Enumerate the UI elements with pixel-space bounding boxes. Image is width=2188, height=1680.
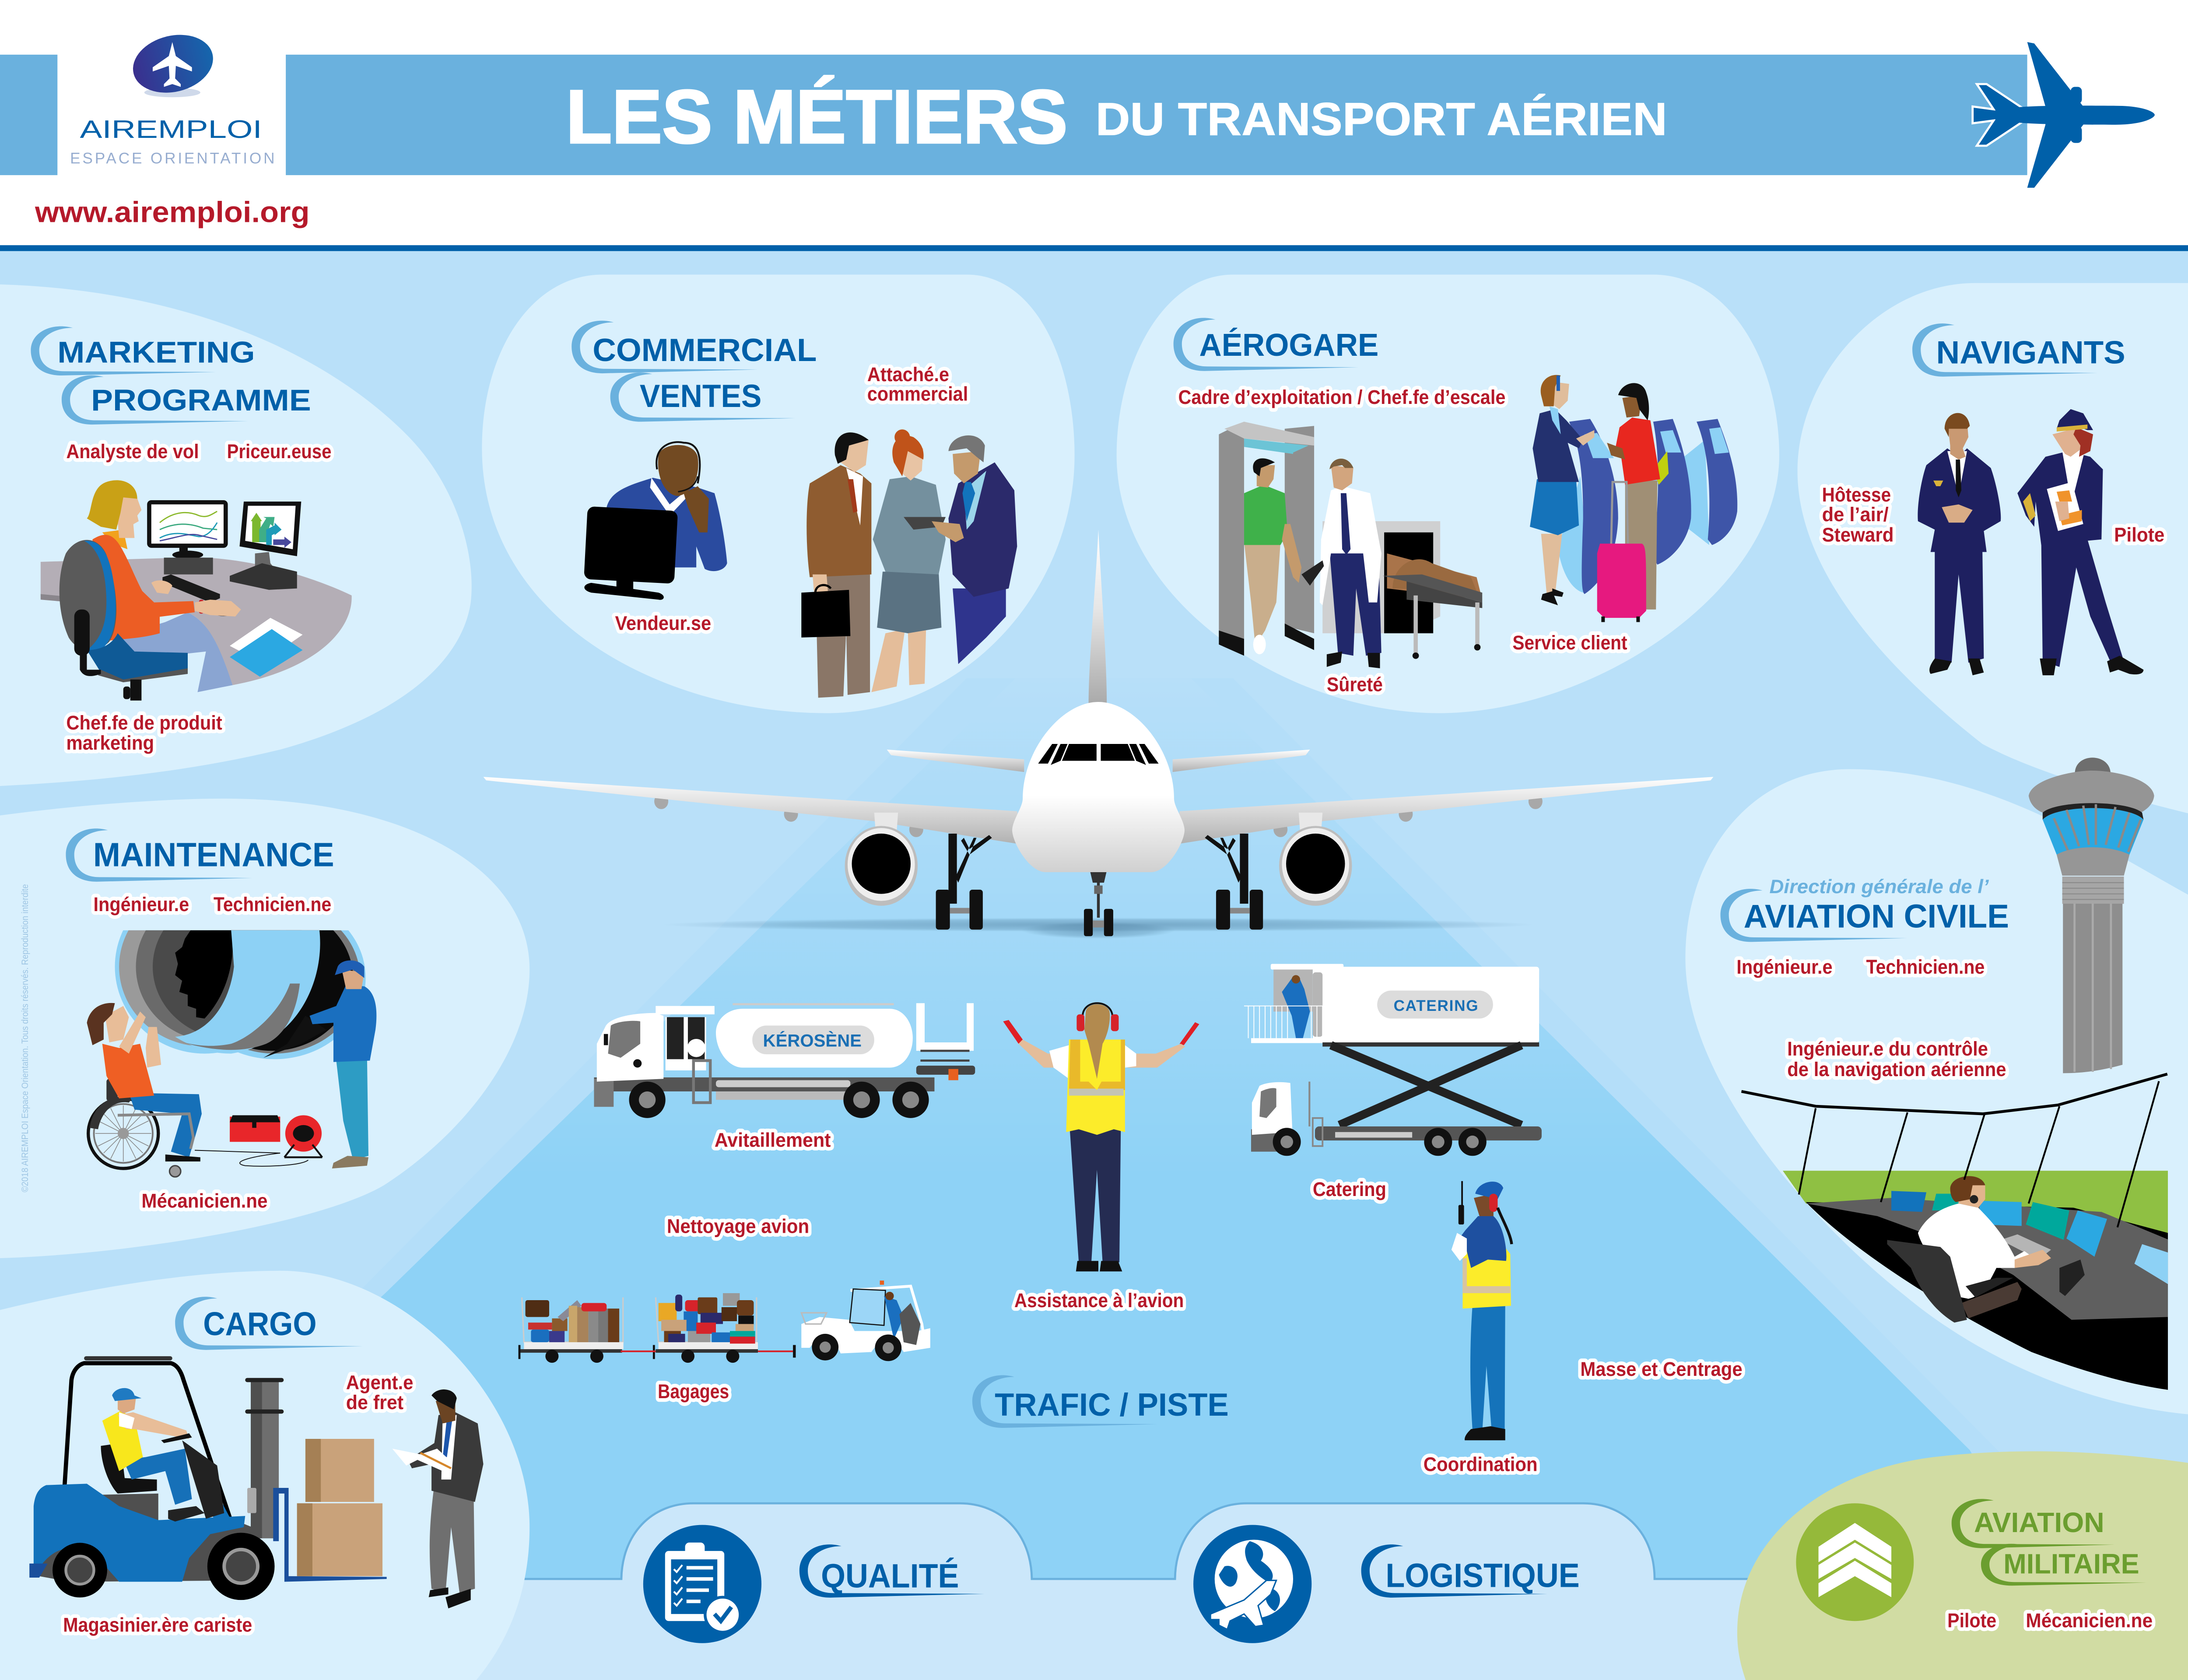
heading: qualite: QUALITÉ [821,1557,959,1595]
heading: trafic piste [972,1375,1229,1428]
job labels: Priceur.euse [227,440,331,463]
job labels [1178,386,1627,696]
illustration: toolbox and cable reel [195,1115,322,1166]
illustration: forklift [29,1356,387,1600]
job labels: Masse et Centrage [1580,1358,1743,1380]
job labels: Pilote [1947,1610,1996,1632]
job labels: Assistance à l’avion [1014,1289,1184,1312]
job labels: Ingénieur.e [1736,956,1833,978]
airplane shadow [663,918,1534,939]
heading: maintenance [66,828,334,882]
illustration: check-in kiosks [1558,419,1737,594]
job labels: Vendeur.se [615,612,711,634]
illustration: security gate [1219,422,1314,656]
illustration: wheelchair mechanic [87,1003,202,1177]
panel background [0,799,529,1258]
icon: chevrons [1796,1503,1914,1621]
panel: marketing programme [0,284,472,786]
job labels [1822,484,2164,546]
job labels [66,440,331,754]
fuselage [1012,702,1185,872]
panel: aviation civile [1685,758,2188,1415]
job labels: Ingénieur.e du contrôle [1787,1038,1988,1060]
copyright: ©2018 AIREMPLOI Espace Orientation. Tous droits réservés. Reproduction interdite [20,884,30,1192]
bottom band with tabs [280,1503,1849,1680]
panel: aviation militaire [1737,1451,2188,1680]
section: logistique [1193,1525,1580,1643]
illustration: technician [310,961,376,1168]
job labels: Technicien.ne [1866,956,1985,978]
illustration: security officer and x-ray machine [1301,459,1482,668]
illustration: fuel truck [594,1003,975,1118]
job labels [63,1371,413,1636]
illustration: catering truck [1244,964,1542,1156]
illustration: control room canopy [1742,1074,2167,1228]
panel background [0,1271,529,1680]
cockpit windows [1038,744,1159,765]
job labels [1947,1610,2153,1632]
tailplanes [887,750,1310,772]
job labels: Attaché.e [867,363,949,386]
heading: commercial ventes: VENTES [640,378,761,414]
job labels: marketing [66,732,154,754]
panel: navigants [1798,283,2188,815]
title: DU TRANSPORT AÉRIEN [1096,93,1667,145]
heading: aviation civile: AVIATION CIVILE [1744,898,2009,934]
job labels: de la navigation aérienne [1787,1058,2006,1080]
illustration: engine [115,930,366,1059]
panel: maintenance [0,799,529,1258]
job labels [94,893,331,1212]
heading: cargo [175,1297,363,1350]
heading: navigants: NAVIGANTS [1936,334,2125,370]
heading: aviation militaire: MILITAIRE [2003,1548,2139,1579]
header rule [0,245,2188,251]
job labels: Magasinier.ère cariste [63,1614,252,1636]
heading: aviation militaire: AVIATION [1974,1507,2104,1538]
panel background [1737,1451,2188,1680]
section: qualite [643,1525,984,1643]
illustration: fuel truck: KÉROSÈNE [763,1031,862,1051]
icon: globe and plane [1193,1525,1311,1643]
illustration: catering truck: CATERING [1394,997,1478,1014]
job labels: Avitaillement [715,1129,831,1151]
heading: commercial ventes: COMMERCIAL [593,332,817,368]
section: trafic piste [519,964,1743,1476]
illustration: control room [1783,1171,2168,1390]
heading: navigants [1912,323,2125,377]
landing gear [936,834,1263,929]
job labels: de fret [346,1391,403,1413]
job labels: Nettoyage avion [667,1215,809,1237]
illustration: ramp coordinator [1452,1181,1511,1440]
wings [484,777,1713,845]
illustration: control tower [2029,758,2154,1073]
website: www.airemploi.org [35,196,310,228]
illustration: baggage trolleys [519,1293,793,1363]
heading: qualite [799,1544,984,1598]
illustration: steward [1918,413,2001,675]
heading: logistique [1361,1544,1580,1598]
heading: logistique: LOGISTIQUE [1385,1557,1580,1595]
logo: ESPACE ORIENTATION [70,150,275,167]
job labels: Catering [1313,1178,1386,1200]
illustration: boxes [297,1439,382,1576]
job labels: Bagages [658,1380,729,1403]
job labels: Agent.e [346,1371,413,1393]
job labels: commercial [867,383,968,405]
job labels [615,363,968,634]
job labels: Chef.fe de produit [66,712,222,734]
job labels: Cadre d’exploitation / Chef.fe d’escale [1178,386,1505,408]
heading: aviation civile: Direction générale de l’ [1770,876,1989,898]
panel background [1798,283,2188,815]
illustration: freight agent [392,1389,484,1608]
airplane [484,530,1713,939]
heading: aerogare [1174,318,1378,371]
engines [845,813,1352,906]
illustration: marshaller [1003,1003,1199,1271]
job labels: Analyste de vol [66,440,199,463]
heading: marketing programme [31,326,311,424]
panel background [1685,769,2188,1415]
illustration: forklift driver [101,1388,224,1522]
job labels: Hôtesse [1822,484,1891,506]
job labels: Pilote [2114,523,2164,546]
job labels: Steward [1822,523,1894,546]
icon: clipboard [643,1525,761,1643]
job labels: Service client [1512,631,1627,654]
title: LES MÉTIERS [566,74,1068,159]
tail fin [1089,530,1107,705]
job labels: Sûreté [1327,673,1383,696]
heading: maintenance: MAINTENANCE [93,836,334,874]
logo: AIREMPLOI [80,116,262,144]
logo [70,27,275,167]
heading: aerogare: AÉROGARE [1199,328,1378,363]
heading: trafic piste: TRAFIC / PISTE [995,1386,1229,1423]
heading: aviation militaire [1952,1499,2146,1585]
heading: marketing programme: PROGRAMME [91,383,311,417]
job labels: Mécanicien.ne [2026,1610,2153,1632]
heading: commercial ventes [572,321,817,422]
job labels: Ingénieur.e [94,893,189,915]
job labels: Technicien.ne [214,893,331,915]
panel background [482,275,1075,713]
nose gear [1084,859,1113,936]
title [566,74,1667,159]
heading: cargo: CARGO [203,1305,317,1342]
illustration: business group [801,429,1017,698]
panel background [1117,275,1779,713]
job labels: de l’air/ [1822,503,1889,526]
runway light beam [84,678,2101,1680]
header [0,27,2155,228]
header band [0,55,2027,175]
job labels [658,1129,1743,1476]
panel background [0,284,472,786]
heading: marketing programme: MARKETING [57,335,255,369]
job labels [1736,956,2006,1080]
illustration: baggage tug [793,1280,930,1361]
icon: header plane [1973,42,2155,188]
panel: aerogare [1117,275,1779,713]
illustration: salesperson [584,442,727,600]
panel: commercial ventes [482,275,1075,713]
illustration: analyst at desk [41,480,352,701]
job labels: Mécanicien.ne [141,1190,267,1212]
job labels: Coordination [1424,1453,1538,1476]
illustration: agent and passenger [1530,375,1669,622]
illustration: pilot [2017,409,2143,675]
heading: aviation civile [1720,876,2009,942]
panel: cargo [0,1271,529,1680]
